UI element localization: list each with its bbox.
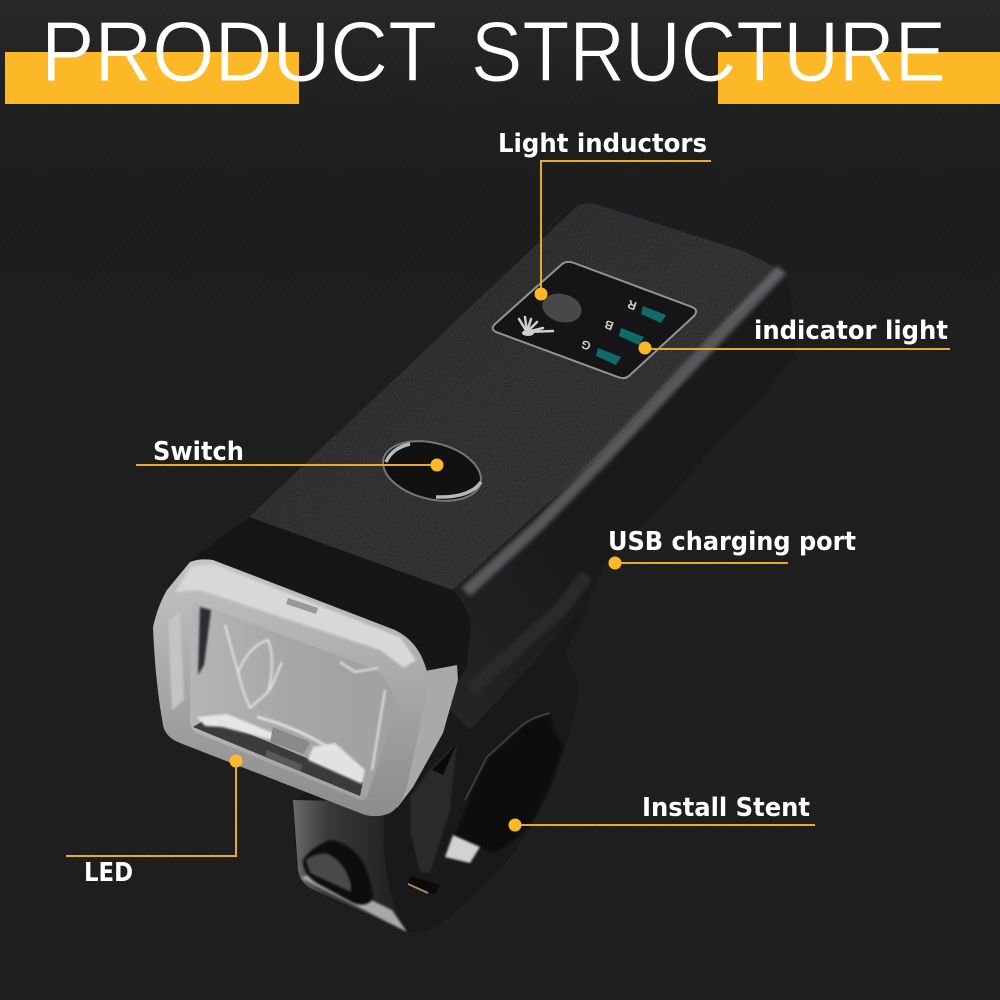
callout: install stent: Install Stent [642,793,810,823]
lens reflections [225,625,385,770]
grooved strut [410,743,457,873]
B indicator: B [602,317,615,333]
front bezel [190,517,471,682]
callout: light inductors [498,129,711,300]
control panel [493,262,696,378]
strap inner black recess [453,713,563,853]
callout: LED [66,754,242,888]
lens flange [397,665,458,808]
lens left highlight [168,612,184,710]
lens top rim [175,564,416,668]
bike light product [153,203,794,933]
mounting strap [293,605,590,933]
R indicator [625,297,666,323]
lens bright lower highlights [197,714,365,784]
callout: switch: Switch [153,437,244,467]
callout: indicator light [638,316,950,354]
lens inner face [190,603,397,800]
B indicator [602,317,644,345]
lens outer frame [153,559,428,816]
plate bright edge [301,872,407,932]
R indicator: R [625,297,638,313]
silver clip [445,835,480,863]
icon: light fan [519,317,553,336]
callout: light inductors: Light inductors [498,129,707,159]
callout: USB charging port [608,527,856,570]
side face crease shade [470,575,587,690]
G indicator: G [579,337,593,353]
callout: install stent [508,793,815,832]
title accent bars [5,52,1000,104]
adjuster knob [303,840,373,905]
crease highlight [466,270,782,592]
lens dark lower strip [193,717,363,796]
body texture [249,203,783,590]
light body side [440,273,794,730]
callout: USB charging port: USB charging port [608,527,856,557]
G indicator [579,337,621,365]
title: STRUCTURE [471,5,946,100]
light body top [249,203,783,590]
light sensor [539,289,585,327]
callout: LED: LED [84,858,133,888]
metal plate [293,800,407,933]
title: PRODUCT [41,5,437,100]
callout: switch [136,437,444,472]
lens tab [286,598,318,614]
callout: indicator light: indicator light [754,316,948,346]
lens left prism [198,607,211,675]
power button [377,432,487,510]
